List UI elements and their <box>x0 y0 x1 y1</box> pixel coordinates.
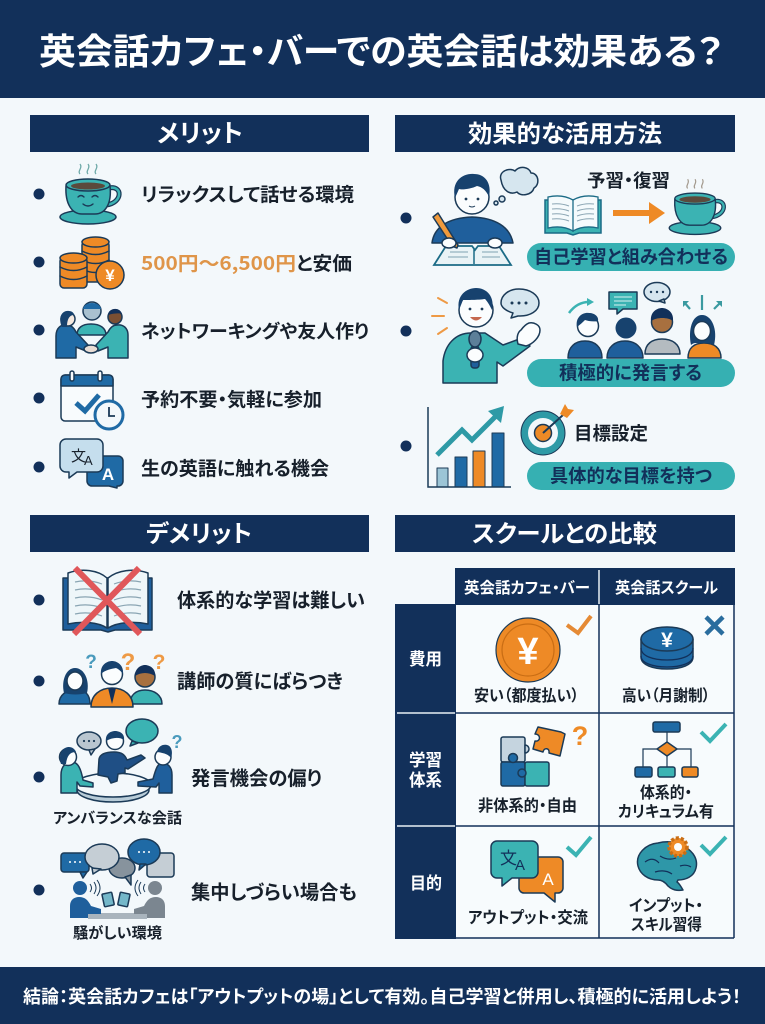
usage item: self study <box>400 167 735 271</box>
table row labels: 体系 <box>409 771 442 790</box>
cell: cafe learning system: ? <box>572 721 588 751</box>
conclusion banner: 結論：英会話カフェは「アウトプットの場」として有効。自己学習と併用し、積極的に活用しよう！ <box>23 986 741 1007</box>
icon: open book <box>545 196 601 235</box>
title banner <box>0 0 765 98</box>
icon: coffee cup <box>669 179 724 234</box>
table row labels: 学習 <box>409 750 442 770</box>
icon: unbalanced table conversation <box>60 719 182 802</box>
usage item: self study: 予習・復習 <box>587 171 670 191</box>
demerit item: teacher quality: 講師の質にばらつき <box>177 671 343 693</box>
table row labels: 費用 <box>409 650 442 669</box>
cell: school learning system: カリキュラム有 <box>618 803 714 821</box>
icon: smiling coffee cup <box>60 164 119 224</box>
panel: demerits <box>30 515 369 942</box>
cell: cafe purpose <box>468 837 591 927</box>
icon: three teachers with question marks: ? <box>85 652 97 673</box>
caption: noisy environment: 騒がしい環境 <box>73 924 162 942</box>
icon: translation bubbles: 文 <box>71 448 86 465</box>
caption: unbalanced conversation: アンバランスな会話 <box>53 810 182 827</box>
panel: comparison with schools <box>395 515 735 939</box>
icon: book crossed out <box>63 568 152 634</box>
heading: comparison: スクールとの比較 <box>472 521 657 548</box>
panel: merits <box>30 115 369 488</box>
usage item: speak actively <box>400 282 735 387</box>
cell: school purpose: インプット・ <box>629 897 703 915</box>
heading: effective usage <box>395 115 735 152</box>
pill: speak actively: 積極的に発言する <box>559 362 702 384</box>
demerit item: systematic study: 体系的な学習は難しい <box>177 589 365 612</box>
icon: unbalanced table conversation: ? <box>172 732 182 752</box>
cell: school cost: 高い（月謝制） <box>622 686 710 705</box>
merit item: price: 500円～6,500円 <box>141 249 296 276</box>
comparison table frame <box>395 568 735 939</box>
pill: speak actively <box>527 359 735 387</box>
icon: growth chart <box>428 406 511 487</box>
merit item: no reservation: 予約不要・気軽に参加 <box>141 389 322 411</box>
icon: coin stacks: ¥ <box>105 266 115 285</box>
cell: school learning system: 体系的・ <box>640 784 692 802</box>
cell: school cost <box>622 617 723 705</box>
icon: three teachers with question marks: ? <box>153 651 165 674</box>
merit item: relaxed environment <box>34 164 354 224</box>
icon: calendar with clock <box>61 371 123 429</box>
table header labels <box>464 579 719 597</box>
icon: coin stacks <box>60 237 124 289</box>
demerit item: teacher quality <box>34 649 343 707</box>
icon: student writing <box>432 167 538 265</box>
merit item: relaxed environment: リラックスして話せる環境 <box>141 184 354 206</box>
heading: merits: メリット <box>157 120 243 148</box>
cell: cafe learning system <box>478 721 588 815</box>
panel: effective usage <box>395 115 735 490</box>
cell: cafe purpose: A <box>542 870 554 889</box>
cell: cafe purpose: アウトプット・交流 <box>468 909 588 927</box>
icon: noisy pub scene <box>61 839 174 919</box>
merit item: networking: ネットワーキングや友人作り <box>141 321 369 342</box>
merit item: price: と安価 <box>296 253 352 275</box>
pill: combine with self study: 自己学習と組み合わせる <box>534 246 728 268</box>
icon: translation bubbles: A <box>102 465 114 484</box>
icon: people shaking hands <box>56 302 128 358</box>
icon: three teachers with question marks <box>59 649 165 707</box>
heading: effective usage: 効果的な活用方法 <box>468 121 662 148</box>
merit item: real English <box>34 439 329 488</box>
table header labels: 英会話スクール <box>615 579 719 597</box>
demerit item: systematic study <box>34 568 365 634</box>
heading: demerits <box>30 515 369 552</box>
heading: merits <box>30 115 369 152</box>
table row labels: 目的 <box>410 874 442 893</box>
icon: group discussion <box>568 282 722 358</box>
cell: school cost: ¥ <box>661 629 673 652</box>
cell: cafe purpose: 文 <box>500 849 517 868</box>
cell: school learning system <box>618 722 726 821</box>
merit item: price <box>34 237 352 289</box>
merit item: no reservation <box>34 371 322 429</box>
icon: speaker with microphone <box>432 288 540 383</box>
demerit item: uneven speaking: 発言機会の偏り <box>191 768 322 790</box>
table header labels: 英会話カフェ・バー <box>464 579 590 597</box>
arrow: study to cafe <box>613 202 665 224</box>
cell: cafe learning system: 非体系的・自由 <box>478 796 577 815</box>
merit item: real English: 生の英語に触れる機会 <box>141 458 329 480</box>
icon: target with dart <box>521 404 574 455</box>
table row labels <box>409 650 442 893</box>
cell: school purpose: スキル習得 <box>631 916 702 934</box>
heading: demerits: デメリット <box>146 520 252 548</box>
usage item: set goals: 目標設定 <box>574 423 648 444</box>
demerit item: noisy: 集中しづらい場合も <box>191 882 357 904</box>
heading: comparison <box>395 515 735 552</box>
cell: cafe purpose: A <box>515 857 525 874</box>
demerit item: uneven speaking <box>34 719 322 827</box>
icon: three teachers with question marks: ? <box>121 649 135 676</box>
cell: cafe cost: ¥ <box>517 631 539 673</box>
usage item: set goals <box>400 404 735 490</box>
pill: concrete goals <box>527 462 735 490</box>
cell: cafe cost <box>474 616 591 705</box>
title banner: 英会話カフェ・バーでの英会話は効果ある？ <box>39 31 723 72</box>
icon: translation bubbles: A <box>84 453 93 468</box>
conclusion banner <box>0 967 765 1024</box>
icon: translation bubbles <box>60 439 123 488</box>
demerit item: noisy <box>34 839 357 942</box>
cell: cafe cost: 安い（都度払い） <box>474 686 579 705</box>
pill: concrete goals: 具体的な目標を持つ <box>550 466 712 486</box>
cell: school purpose <box>629 837 726 934</box>
merit item: networking <box>34 302 369 358</box>
